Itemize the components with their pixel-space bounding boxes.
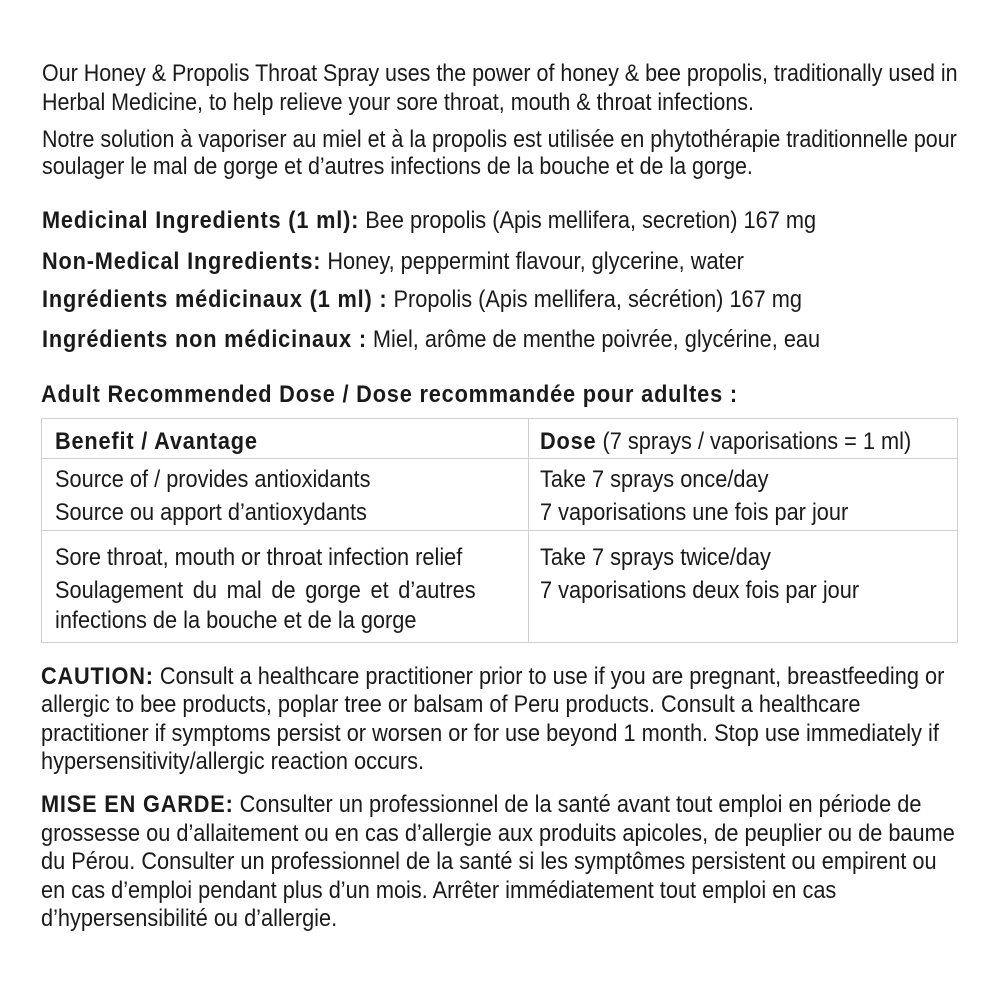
dose table: infections de la bouche et de la gorge [55, 607, 416, 634]
caution english: hypersensitivity/allergic reaction occurs. [41, 748, 424, 775]
dose table: Take 7 sprays once/day [540, 466, 768, 493]
intro text: Notre solution à vaporiser au miel et à la propolis est utilisée en phytothérapie traditionnelle pour [42, 126, 957, 153]
dose table: Source of / provides antioxidants [55, 466, 370, 493]
caution english [41, 663, 944, 775]
ingredients: Ingrédients non médicinaux : Miel, arôme de menthe poivrée, glycérine, eau [42, 326, 820, 353]
dose heading: Adult Recommended Dose / Dose recommandée pour adultes : [41, 381, 738, 408]
dose table: 7 vaporisations deux fois par jour [540, 577, 859, 604]
dose table: Source ou apport d’antioxydants [55, 499, 367, 526]
dose table: Dose (7 sprays / vaporisations = 1 ml) [540, 428, 911, 455]
dose table: Benefit / Avantage [55, 428, 258, 455]
dose table: Sore throat, mouth or throat infection relief [55, 544, 462, 571]
ingredients: Medicinal Ingredients (1 ml): Bee propolis (Apis mellifera, secretion) 167 mg [42, 207, 816, 234]
ingredients: Ingrédients médicinaux (1 ml) : Propolis (Apis mellifera, sécrétion) 167 mg [42, 286, 802, 313]
intro text: Herbal Medicine, to help relieve your sore throat, mouth & throat infections. [42, 89, 754, 116]
caution french [41, 791, 955, 932]
dose table: Soulagement du mal de gorge et d’autres [55, 577, 476, 604]
caution french: MISE EN GARDE: Consulter un professionnel de la santé avant tout emploi en période de [41, 791, 921, 818]
dose table: 7 vaporisations une fois par jour [540, 499, 848, 526]
intro text: Our Honey & Propolis Throat Spray uses the power of honey & bee propolis, traditionally used in [42, 60, 958, 87]
caution french: d’hypersensibilité ou d’allergie. [41, 905, 337, 932]
intro text [42, 60, 958, 180]
caution french: grossesse ou d’allaitement ou en cas d’allergie aux produits apicoles, de peuplier ou de baume [41, 820, 955, 847]
caution french: en cas d’emploi pendant plus d’un mois. Arrêter immédiatement tout emploi en cas [41, 877, 836, 904]
caution french: du Pérou. Consulter un professionnel de la santé si les symptômes persistent ou empirent ou [41, 848, 937, 875]
intro text: soulager le mal de gorge et d’autres infections de la bouche et de la gorge. [42, 153, 753, 180]
ingredients [42, 207, 820, 353]
caution english: CAUTION: Consult a healthcare practitioner prior to use if you are pregnant, breastfeeding or [41, 663, 944, 690]
caution english: practitioner if symptoms persist or worsen or for use beyond 1 month. Stop use immediately if [41, 720, 939, 747]
ingredients: Non-Medical Ingredients: Honey, peppermint flavour, glycerine, water [42, 248, 744, 275]
dose table: Take 7 sprays twice/day [540, 544, 771, 571]
dose table [41, 418, 958, 643]
caution english: allergic to bee products, poplar tree or balsam of Peru products. Consult a healthcare [41, 691, 860, 718]
